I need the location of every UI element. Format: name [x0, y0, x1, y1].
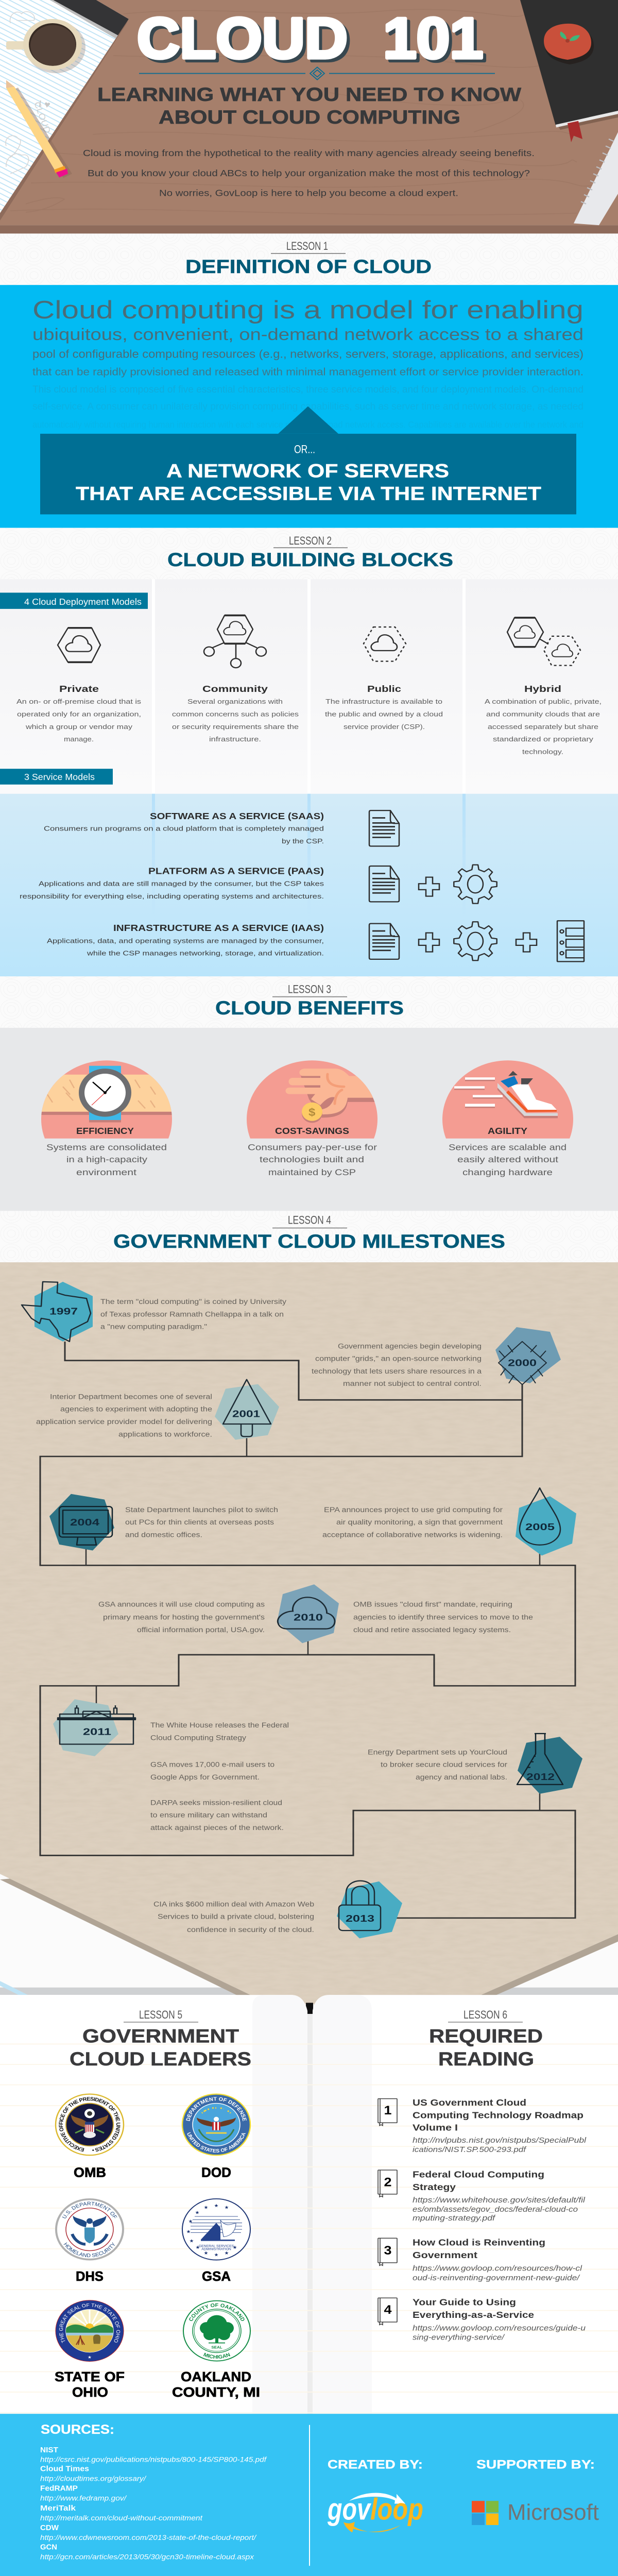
milestone: 2013: Services to build a private cloud, bolstering [158, 1913, 314, 1921]
milestone: 2005 [322, 1488, 576, 1555]
definition text: that can be rapidly provisioned and released with minimal management effort or service provider interaction. [32, 366, 583, 378]
seal: DHS: HOMELAND SECURITY [64, 2242, 115, 2258]
panel: definition [0, 285, 618, 528]
lesson 2 heading: CLOUD BUILDING BLOCKS [167, 550, 453, 571]
benefit: efficiency: EFFICIENCY [76, 1126, 134, 1137]
milestone: 2010: OMB issues "cloud first" mandate, requiring [353, 1601, 512, 1608]
card: private: manage. [64, 736, 94, 743]
benefit: cost savings: technologies built and [260, 1155, 364, 1164]
lesson 5 heading: LESSON 5 [139, 2008, 182, 2022]
sources: CDW [40, 2524, 59, 2532]
seal: Ohio: THE GREAT SEAL OF THE STATE OF OHIO [59, 2303, 121, 2343]
supported by [472, 2458, 599, 2525]
definition text [32, 296, 583, 430]
sources: http://csrc.nist.gov/publications/nistpubs/800-145/SP800-145.pdf [40, 2456, 267, 2464]
logo: govloop [327, 2492, 423, 2532]
callout box: OR... [294, 443, 315, 456]
benefit: cost savings: $ [308, 1106, 316, 1118]
seal: OMB: EXECUTIVE OFFICE OF THE PRESIDENT OF THE UNITED STATES • [59, 2097, 121, 2151]
card: public: the public and owned by a cloud [325, 710, 443, 718]
seal: Ohio [56, 2300, 124, 2362]
header: desk scene [0, 0, 618, 233]
tag: 3 service models: 3 Service Models [24, 772, 95, 782]
service: IaaS [47, 921, 584, 961]
pencil [6, 80, 72, 178]
notebook paper [0, 0, 165, 225]
seal: GSA: ★ [225, 2205, 229, 2210]
benefit: efficiency: in a high-capacity [66, 1155, 148, 1164]
label state of Ohio: STATE OF [55, 2369, 125, 2384]
milestone: 2005: 2005 [525, 1522, 555, 1533]
tag: 4 cloud deployment models [0, 592, 148, 609]
benefit: agility: Services are scalable and [449, 1143, 566, 1152]
seal: Oakland County [183, 2300, 251, 2362]
service: SaaS: by the CSP. [282, 838, 324, 845]
milestone: 2001: applications to workforce. [118, 1431, 212, 1438]
milestone: 2010: cloud and retire associated legacy systems. [353, 1626, 511, 1634]
sources: NIST [40, 2446, 59, 2454]
reading item 2: Federal Cloud Computing [413, 2170, 544, 2180]
milestone: 1997: a "new computing paradigm." [100, 1323, 207, 1331]
milestone: 2000 [312, 1327, 561, 1388]
icon: server [557, 921, 584, 961]
milestone: 2005: EPA announces project to use grid computing for [324, 1506, 503, 1514]
seal: DHS: U.S. DEPARTMENT OF [62, 2202, 117, 2218]
lesson 3 heading: LESSON 3 [288, 983, 331, 996]
benefit: efficiency [41, 1060, 172, 1175]
lesson 1 heading: DEFINITION OF CLOUD [185, 257, 432, 277]
reading item 4: 4 [384, 2303, 392, 2317]
label state of Ohio [55, 2369, 125, 2400]
milestone: 2011 [53, 1699, 289, 1832]
card: public: service provider (CSP). [344, 723, 425, 731]
benefit: agility: AGILITY [488, 1126, 527, 1137]
reading item 2: Strategy [413, 2182, 456, 2192]
logo: govloop: loop [370, 2492, 423, 2527]
timeline connector [40, 1342, 575, 1918]
benefit: agility [442, 1060, 573, 1177]
intro text [83, 148, 535, 198]
subtitle: ABOUT CLOUD COMPUTING [159, 107, 460, 128]
label state of Ohio: OHIO [72, 2384, 108, 2400]
card: hybrid: and community clouds that are [486, 710, 600, 718]
card: community: common concerns such as policies [172, 710, 299, 718]
reading item 3: oud-is-reinventing-government-new-guide/ [413, 2274, 580, 2282]
service: SaaS: SOFTWARE AS A SERVICE (SAAS) [150, 811, 324, 822]
intro text: Cloud is moving from the hypothetical to the reality with many agencies already seeing benefits. [83, 148, 535, 158]
seal: GSA: ★ [214, 2203, 219, 2209]
definition text: pool of configurable computing resources (e.g., networks, servers, storage, applications, and services) [32, 348, 583, 361]
reading item 2: es/omb/assets/egov_docs/federal-cloud-co [413, 2206, 578, 2214]
milestone: 2000: manner not subject to central control. [343, 1380, 482, 1388]
reading item 4 [378, 2298, 586, 2342]
reading item 1: US Government Cloud [413, 2098, 526, 2108]
seal: Ohio: ★ [88, 2355, 92, 2360]
benefit: cost savings: Consumers pay-per-use for [248, 1143, 377, 1152]
milestone: 2013: 2013 [346, 1913, 374, 1924]
seal: Oakland County: COUNTY OF OAKLAND [189, 2303, 245, 2321]
seal: DOD: DEPARTMENT OF DEFENSE [186, 2097, 247, 2122]
card: public: The infrastructure is available to [325, 698, 442, 705]
sources: SOURCES: [41, 2422, 114, 2437]
milestone: 2013: confidence in security of the cloud. [187, 1926, 314, 1934]
panel: required reading [378, 2008, 587, 2342]
sources: http://www.fedramp.gov/ [40, 2495, 127, 2502]
benefit: cost savings: COST-SAVINGS [275, 1126, 349, 1137]
intro text: No worries, GovLoop is here to help you become a cloud expert. [159, 188, 458, 198]
reading item 1 [378, 2098, 587, 2154]
benefit: cost savings: maintained by CSP [268, 1168, 356, 1177]
lesson 5 heading: CLOUD LEADERS [70, 2049, 251, 2070]
milestone: 2001: Interior Department becomes one of several [50, 1393, 212, 1401]
panel: cloud benefits [0, 1028, 618, 1211]
title [137, 6, 486, 73]
milestone: 2012: Energy Department sets up YourCloud [368, 1749, 507, 1756]
label DOD: DOD [201, 2165, 231, 2180]
milestone: 2012 [368, 1734, 582, 1794]
panel: service models [0, 794, 618, 976]
callout box [40, 406, 576, 514]
panel: footer [0, 2414, 618, 2576]
milestone: 2011: Cloud Computing Strategy [150, 1734, 247, 1742]
label GSA: GSA [202, 2268, 231, 2284]
milestone: 2000: Government agencies begin developing [338, 1343, 482, 1350]
reading item 1: Volume I [413, 2123, 458, 2133]
card: community: infrastructure. [209, 736, 261, 743]
sources: http://meritalk.com/cloud-without-commitment [40, 2515, 203, 2522]
seal: GSA: ★ [188, 2219, 193, 2224]
notebook paper: CLOUD [32, 101, 53, 134]
panel: deployment models [0, 579, 618, 794]
definition text: ubiquitous, convenient, on-demand network access to a shared [32, 326, 583, 344]
wood desk [0, 0, 618, 225]
ruler [574, 132, 618, 225]
reading item 1: http://nvlpubs.nist.gov/nistpubs/SpecialPubl [413, 2137, 587, 2145]
service: PaaS [20, 865, 497, 904]
service: SaaS [44, 810, 399, 846]
milestone: 2013 [153, 1881, 402, 1938]
lesson 3 heading: CLOUD BENEFITS [215, 998, 404, 1019]
card: hybrid [485, 618, 602, 755]
subtitle [97, 84, 521, 128]
title divider [139, 67, 495, 80]
benefit: agility: changing hardware [462, 1168, 553, 1177]
milestone: 2004: 2004 [70, 1517, 99, 1528]
sources [40, 2422, 267, 2561]
sources: http://www.cdwnewsroom.com/2013-state-of-the-cloud-report/ [40, 2534, 257, 2542]
card: hybrid: A combination of public, private, [485, 698, 602, 705]
seal: Oakland County: MICHIGAN [203, 2352, 231, 2359]
milestone: 2011: Google Apps for Government. [150, 1774, 260, 1782]
title: CLOUD [140, 9, 351, 73]
created by: CREATED BY: [328, 2458, 423, 2471]
card: public: Public [367, 684, 401, 694]
milestone: 2011: to ensure military can withstand [150, 1811, 267, 1819]
seal: GSA: ★ [190, 2239, 194, 2244]
milestone: 2011: attack against pieces of the network. [150, 1824, 284, 1832]
milestone: 2000: technology that lets users share resources in a [312, 1368, 482, 1376]
seal: DHS [55, 2198, 124, 2261]
card: community: Community [202, 684, 268, 694]
reading item 3: How Cloud is Reinventing [413, 2238, 545, 2248]
lesson 6 heading: LESSON 6 [464, 2008, 507, 2022]
service: IaaS: while the CSP manages networking, storage, and virtualization. [87, 950, 324, 957]
card: private: An on- or off-premise cloud that is [16, 698, 141, 705]
seal: GSA: GENERAL SERVICES [199, 2245, 234, 2248]
callout box: A NETWORK OF SERVERS [166, 461, 449, 482]
card: private: which a group or vendor may [25, 723, 132, 731]
reading item 1: ications/NIST.SP.500-293.pdf [413, 2146, 527, 2154]
label Oakland County: OAKLAND [181, 2369, 251, 2384]
divider [309, 2425, 310, 2566]
milestone: 2012: to broker secure cloud services for [381, 1761, 507, 1769]
wood grain [10, 9, 592, 215]
seal: GSA: ★ [225, 2250, 229, 2256]
service: PaaS: responsibility for everything else, including operating systems and architectures. [20, 893, 324, 900]
benefit: agility: easily altered without [457, 1155, 558, 1164]
milestone: 2010: agencies to identify three services to move to the [353, 1614, 533, 1621]
lesson 3 heading [215, 983, 404, 1019]
tag: 3 service models [0, 769, 113, 785]
reading item 1: 1 [384, 2104, 392, 2117]
title: 101 [383, 6, 483, 70]
milestone: 2004: out PCs for thin clients at overseas posts [125, 1519, 274, 1527]
logo: govloop: gov [327, 2492, 371, 2527]
lesson 1 heading [185, 240, 432, 277]
milestone: 2004: State Department launches pilot to switch [125, 1506, 278, 1514]
title: 101 [386, 9, 486, 73]
title: CLOUD [137, 6, 348, 70]
seal: GSA: ★ [195, 2210, 200, 2215]
label Oakland County: COUNTY, MI [172, 2384, 260, 2400]
milestone: 2011: DARPA seeks mission-resilient cloud [150, 1799, 282, 1807]
sources: http://gcn.com/articles/2013/05/30/gcn30-timeline-cloud.aspx [40, 2553, 254, 2561]
seal: DOD [181, 2094, 251, 2156]
reading item 4: https://www.govloop.com/resources/guide-u [413, 2324, 586, 2332]
label DHS: DHS [76, 2268, 104, 2284]
reading item 4: Your Guide to Using [413, 2298, 516, 2308]
lesson 2 heading: LESSON 2 [289, 534, 332, 548]
sources: http://cloudtimes.org/glossary/ [40, 2475, 147, 2483]
milestone: 2010: 2010 [294, 1612, 323, 1623]
lesson 5 heading [70, 2008, 251, 2070]
milestone: 2001: 2001 [232, 1409, 260, 1419]
callout box: THAT ARE ACCESSIBLE VIA THE INTERNET [76, 483, 541, 504]
definition text: Cloud computing is a model for enabling [32, 296, 583, 324]
reading item 4: sing-everything-service/ [413, 2333, 505, 2342]
reading item 3: Government [413, 2250, 478, 2261]
sources: GCN [40, 2543, 57, 2552]
service: SaaS: Consumers run programs on a cloud platform that is completely managed [44, 825, 324, 833]
milestone: 1997: of Texas professor Ramnath Chellappa in a talk on [100, 1311, 284, 1318]
card: community: Several organizations with [187, 698, 283, 705]
lesson 5 heading: GOVERNMENT [82, 2026, 239, 2047]
milestone: 2001: agencies to experiment with adopting the [60, 1405, 212, 1413]
supported by: SUPPORTED BY: [476, 2458, 595, 2471]
seal: GSA: ★ [204, 2250, 209, 2256]
card: hybrid: standardized or proprietary [493, 736, 593, 743]
lesson 4 heading [113, 1214, 505, 1252]
benefit: efficiency: environment [76, 1168, 136, 1177]
bookmark ribbon [568, 121, 582, 142]
seal: DOD: UNITED STATES OF AMERICA [187, 2132, 246, 2153]
dark notebook [520, 0, 618, 130]
apple [544, 24, 594, 64]
milestone: 2011: GSA moves 17,000 e-mail users to [150, 1761, 274, 1769]
lesson 4 heading: GOVERNMENT CLOUD MILESTONES [113, 1231, 505, 1252]
service: PaaS: PLATFORM AS A SERVICE (PAAS) [148, 866, 324, 876]
milestone: 1997 [22, 1282, 287, 1342]
card: community: or security requirements share the [172, 723, 299, 731]
seal: GSA: ★ [186, 2229, 191, 2234]
milestone: 2010: GSA announces it will use cloud computing as [98, 1601, 265, 1608]
milestone: 2004 [49, 1494, 278, 1551]
seal: GSA: ★ [196, 2245, 200, 2250]
reading item 1: Computing Technology Roadmap [413, 2110, 583, 2121]
service: IaaS: Applications, data, and operating systems are managed by the consumer, [47, 937, 324, 944]
subtitle: LEARNING WHAT YOU NEED TO KNOW [97, 84, 521, 106]
card: private [16, 628, 141, 743]
milestone: 2011: 2011 [83, 1726, 111, 1737]
reading item 2 [378, 2170, 586, 2223]
logo: Microsoft: Microsoft [507, 2500, 599, 2525]
lesson 6 heading: READING [438, 2049, 534, 2070]
milestone: 2005: acceptance of collaborative networks is widening. [322, 1531, 503, 1539]
card: private: operated only for an organization, [17, 710, 141, 718]
milestone: 2012: 2012 [526, 1772, 555, 1782]
book back strip [0, 1981, 618, 1995]
milestone: 2001 [36, 1380, 279, 1440]
seal: GSA [182, 2199, 250, 2260]
label Oakland County [172, 2369, 260, 2400]
reading item 3: 3 [384, 2244, 392, 2257]
lesson 2 heading [167, 534, 453, 571]
milestone: 1997: 1997 [49, 1307, 78, 1317]
panel: government cloud leaders [55, 2008, 260, 2400]
milestone: 2010 [98, 1584, 533, 1643]
seal: GSA: ★ [214, 2252, 219, 2258]
lesson 1 heading: LESSON 1 [286, 240, 328, 252]
card: hybrid: technology. [522, 748, 563, 755]
milestone: 2001: application service provider model for delivering [36, 1418, 212, 1426]
milestone: 2013: CIA inks $600 million deal with Amazon Web [153, 1901, 314, 1908]
lesson 4 heading: LESSON 4 [288, 1214, 331, 1227]
benefit: efficiency: Systems are consolidated [46, 1143, 167, 1152]
service: PaaS: Applications and data are still managed by the consumer, but the CSP takes [39, 880, 324, 888]
card: public [325, 627, 443, 731]
milestone: 2010: primary means for hosting the government's [103, 1614, 265, 1621]
card: hybrid: accessed separately but share [488, 723, 598, 731]
seal: GSA: ★ [233, 2245, 237, 2250]
sources: MeriTalk [40, 2504, 76, 2513]
label OMB: OMB [74, 2165, 106, 2180]
panel: milestones timeline [0, 1262, 618, 2013]
milestone: 1997: The term "cloud computing" is coined by University [100, 1298, 287, 1306]
milestone: 2010: official information portal, USA.gov. [137, 1626, 265, 1634]
coffee cup [6, 19, 85, 73]
milestone: 2011: The White House releases the Federal [150, 1722, 289, 1730]
reading item 2: mputing-strategy.pdf [413, 2214, 496, 2223]
tag: 4 cloud deployment models: 4 Cloud Deployment Models [24, 597, 142, 607]
milestone: 2005: air quality monitoring, a sign that government [336, 1519, 503, 1527]
logo: Microsoft [472, 2500, 599, 2525]
seal: Oakland County: SEAL [211, 2345, 222, 2349]
lesson 6 heading: REQUIRED [429, 2026, 543, 2047]
reading item 2: https://www.whitehouse.gov/sites/default/fil [413, 2196, 586, 2205]
sources: FedRAMP [40, 2484, 78, 2493]
reading item 2: 2 [384, 2176, 392, 2189]
milestone: 2000: computer "grids," an open-source networking [315, 1355, 482, 1363]
notebook paper: I ♥ [38, 99, 51, 110]
milestone: 2004: and domestic offices. [125, 1531, 202, 1539]
seal: GSA: ★ [204, 2205, 209, 2210]
created by [327, 2458, 423, 2532]
intro text: But do you know your cloud ABCs to help your organization make the most of this technology? [88, 168, 530, 178]
card: community [172, 615, 299, 743]
benefit: cost savings [247, 1060, 377, 1177]
dark folder [53, 0, 129, 36]
seal: GSA: ADMINISTRATION [201, 2248, 231, 2251]
dark desk edge [0, 225, 618, 233]
lesson 6 heading [429, 2008, 543, 2070]
sources: Cloud Times [40, 2465, 89, 2473]
card: private: Private [59, 684, 99, 694]
reading item 3 [378, 2238, 582, 2282]
card: hybrid: Hybrid [524, 684, 561, 694]
milestone: 2012: agency and national labs. [416, 1774, 507, 1782]
reading item 4: Everything-as-a-Service [413, 2310, 534, 2320]
milestone: 2000: 2000 [508, 1358, 537, 1368]
reading item 3: https://www.govloop.com/resources/how-cl [413, 2264, 582, 2273]
service: IaaS: INFRASTRUCTURE AS A SERVICE (IAAS) [113, 923, 324, 934]
book pages background [0, 1995, 618, 2414]
